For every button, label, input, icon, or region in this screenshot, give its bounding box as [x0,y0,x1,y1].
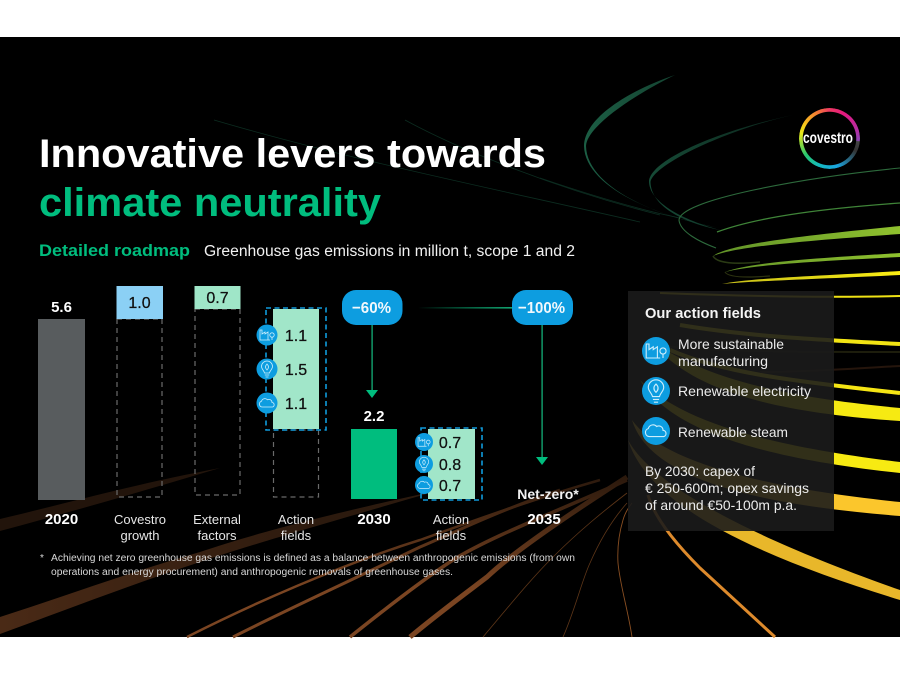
callout: minus 100 percent: −100% [518,300,565,317]
item: manufacturing [678,336,784,369]
bar: Covestro growth: growth [120,528,160,543]
bar: External factors [193,286,241,543]
bar: Action fields to 2030: 1.1 [285,396,307,413]
icon: manufacturing [256,324,278,346]
icon: steam [256,392,278,414]
bar: Covestro growth: 1.0 [128,295,151,312]
item: manufacturing: manufacturing [678,353,768,369]
icon: steam large [642,417,670,445]
panel: our action fields [628,291,834,531]
logo ring: covestro [798,108,860,169]
arrow: to 2035 [536,324,548,465]
label: net-zero 2035: 2035 [527,511,561,528]
title: climate neutrality [39,181,382,225]
panel heading: Our action fields [645,306,761,322]
icon: electricity small [415,455,433,473]
bar: External factors: 0.7 [206,290,229,307]
bar: Action fields to 2030: fields [281,528,312,543]
panel note: capex and opex [645,463,809,513]
bar: 2020: 5.6 [51,299,72,316]
bar: Covestro growth [114,286,166,543]
item: manufacturing: More sustainable [678,336,784,352]
footnote: operations and energy procurement) and anthropogenic removals of greenhouse gases. [51,567,453,578]
panel note: capex and opex: By 2030: capex of [645,463,755,479]
bar: External factors: factors [197,528,237,543]
bar: Action fields to 2030: Action [278,512,314,527]
subtitle: Greenhouse gas emissions in million t, scope 1 and 2 [204,243,575,260]
bar: 2030: 2.2 [364,408,384,425]
icon: electricity large [642,377,670,405]
subtitle [39,242,575,260]
subtitle: Detailed roadmap [39,242,190,260]
bar: 2030 [351,408,397,528]
bar: 2020: 2020 [45,511,78,528]
callout: minus 60 percent: −60% [352,300,391,317]
panel note: capex and opex: of around €50-100m p.a. [645,497,797,513]
label: net-zero 2035 [517,486,579,528]
bar: Action fields to 2035: 0.8 [439,457,461,474]
bar: Action fields to 2035: fields [436,528,467,543]
footnote: Achieving net zero greenhouse gas emissions is defined as a balance between anthropogenic emissions (from own [51,553,575,564]
item: steam: Renewable steam [678,424,788,440]
bar: Action fields to 2030: 1.1 [285,328,307,345]
footnote [40,553,575,578]
icon: manufacturing small [415,433,433,451]
title: Innovative levers towards [39,132,546,176]
bar: External factors: External [193,512,241,527]
bar: 2030: 2030 [357,511,391,528]
arrow: to 2030 [366,324,378,398]
connector line between pills [418,307,513,309]
bar: Action fields to 2035: 0.7 [439,478,461,495]
label: net-zero 2035: Net-zero* [517,486,579,502]
bar: Action fields to 2035: 0.7 [439,435,461,452]
item: electricity: Renewable electricity [678,383,811,399]
icon: manufacturing large [642,337,670,365]
bar: Action fields to 2030: 1.5 [285,362,307,379]
callout: minus 60 percent [342,290,402,325]
title [39,132,546,225]
bar: 2020 [38,299,85,528]
callout: minus 100 percent [512,290,573,325]
icon: steam small [415,476,433,494]
bar: Action fields to 2035 [415,428,482,543]
logo text: covestro: covestro [803,130,853,147]
bar: Covestro growth: Covestro [114,512,166,527]
icon: electricity [256,358,278,380]
panel note: capex and opex: € 250-600m; opex savings [645,480,809,496]
footnote: * [40,553,44,564]
bar: Action fields to 2030 [256,308,326,543]
bar: Action fields to 2035: Action [433,512,469,527]
